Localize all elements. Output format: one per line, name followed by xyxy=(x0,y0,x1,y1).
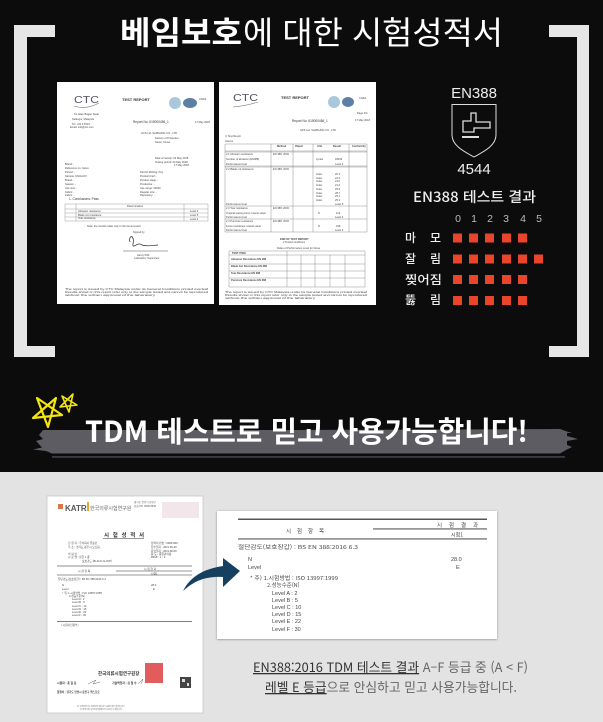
document: KATRI test report: 발행처 : 경기도 안양시 동안구 엑스포로 xyxy=(57,690,100,694)
document: CTC test report page 2: EN 388: 2003 xyxy=(273,219,289,223)
rating chart xyxy=(405,213,543,308)
document: CTC test report page 2: 29.3 xyxy=(335,187,341,191)
document: CTC test report page 2: Level 4 xyxy=(335,228,344,232)
callout panel: magnified test result: 2.성능수준(N) xyxy=(267,581,300,589)
document: KATRI test report: 접수일자 : 2021.05.20 xyxy=(151,545,177,549)
scale numbers xyxy=(455,213,542,225)
document: CTC test report page 1: Fabric: - xyxy=(65,193,75,197)
document: CTC test report page 1: Sample: UNIGLOV xyxy=(65,174,87,178)
document: KATRI test report: Level E : 22 xyxy=(72,610,87,614)
callout panel: magnified test result: N xyxy=(248,557,252,563)
document: CTC test report page 2: II. Test Result xyxy=(225,134,241,138)
callout panel: magnified test result: 28.0 xyxy=(451,557,462,563)
document: KATRI test report: Level F : 30 xyxy=(72,613,87,617)
document: KATRI test report: 보호가드 (BLACK GLOVE) xyxy=(82,559,112,563)
document: KATRI test report: 시험1 xyxy=(151,572,158,576)
document: CTC test report page 2: N xyxy=(318,224,320,228)
document: CTC test report page 2: Number of abrasion (EN388) xyxy=(226,157,259,161)
document: KATRI test report: 의 뢰 인 : xyxy=(68,552,79,556)
document: CTC test report page 2: 158 xyxy=(336,224,341,228)
document: KATRI test report: PAGE : 1 / 2 xyxy=(151,555,166,559)
caption text: EN388:2016 TDM 테스트 결과 A–F 등급 중 (A < F) xyxy=(253,657,528,676)
document: CTC test report page 1: TEST REPORT xyxy=(122,97,151,102)
document: CTC test report page 1: 1. Conclusions: Pass xyxy=(69,197,99,201)
document: CTC test report page 1: Repository: - xyxy=(140,193,155,197)
document: CTC test report page 1: Seoul, Korea xyxy=(155,140,171,144)
document: CTC test report page 1: Email: info@ctc.com xyxy=(70,125,94,129)
callout panel: magnified test result: 시 험 결 과 xyxy=(437,521,478,529)
document: KATRI test report: KATR xyxy=(65,504,87,513)
document: KATRI test report xyxy=(47,496,203,713)
document: CTC test report page 2: Results shown in this report refer only to the sample tested and cannot be reproduced xyxy=(225,293,368,297)
title: 에 대한 시험성적서 xyxy=(243,8,503,54)
document: CTC test report page 1: Selangor, Malaysia xyxy=(72,117,94,121)
document: CTC test report page 1: 17 May 2018 xyxy=(174,163,190,167)
document: CTC test report page 1: Product brief: - xyxy=(140,174,157,178)
document: KATRI test report: * 주) 1.시험방법 : ISO 13997:1999 xyxy=(62,591,102,595)
document: KATRI test report: N xyxy=(62,583,64,587)
callout panel: magnified test result: 절단감도(보호장갑) : BS EN 388:2016 6.3 xyxy=(238,543,358,551)
document: CTC test report page 2: Unit xyxy=(317,144,322,148)
callout panel: magnified test result: 시 험 항 목 xyxy=(286,527,324,535)
rating squares xyxy=(453,234,543,305)
scale numbers: 4 xyxy=(520,213,526,225)
caption text: 레벨 E 등급으로 안심하고 믿고 사용가능합니다. xyxy=(265,677,517,696)
document: CTC test report page 2: Force resistance: lowest value xyxy=(226,224,261,228)
document: KATRI test report: 시 료 명 : 장갑 1 종 xyxy=(68,555,90,559)
document: CTC test report page 1: without the written approval of the laboratory xyxy=(65,293,156,297)
document: CTC test report page 1: Tear resistance xyxy=(78,216,96,220)
document: CTC test report page 1: Abrasion resistance xyxy=(78,209,101,213)
heading: EN388: EN388 xyxy=(451,85,497,102)
document: CTC test report page 1: CNAS xyxy=(199,97,206,101)
row labels xyxy=(405,229,442,308)
row labels: 뚫 xyxy=(405,291,416,308)
light background panel xyxy=(0,472,603,722)
document: CTC test report page 1: The report is issued by CTC Malaysia under its General Conditions printed overleaf xyxy=(65,287,208,291)
caption text xyxy=(253,657,528,696)
document: KATRI test report: 경기도 안양시 동안구 xyxy=(134,500,157,504)
document: CTC test report page 2: Index xyxy=(316,179,323,183)
document: CTC test report page 2: Object xyxy=(295,144,303,148)
document: CTC test report page 1: Results shown in this report refer only to the sample tested and cannot be reproduced xyxy=(65,290,209,294)
document: CTC test report page 1: Brand: - xyxy=(65,162,74,166)
document: KATRI test report: 완료일자 : 2021.06.09 xyxy=(151,549,177,553)
document: CTC test report page 2: TEST REPORT xyxy=(281,95,310,100)
document: CTC test report page 2: Performance level xyxy=(226,215,247,219)
document: CTC test report page 1: Blade cut resistance xyxy=(78,213,102,217)
document: CTC test report page 2: Conformity xyxy=(352,144,366,148)
document: KATRI test report: 한국의류시험연구원 xyxy=(90,505,132,512)
document: CTC test report page 2: Level 5 xyxy=(335,202,344,206)
document: KATRI test report: 용 도 : 품질관리용 xyxy=(151,552,172,556)
document: CTC test report page 2: Performance level xyxy=(226,202,247,206)
document: CTC test report page 2: EN 388: 2003 xyxy=(273,206,289,210)
callout panel: magnified test result: Level C : 10 xyxy=(272,605,301,611)
document: KATRI test report: 절단감도(보호장갑) : BS EN 388:2016 6.3 xyxy=(58,577,106,581)
frame brackets xyxy=(14,25,589,357)
document: CTC test report page 1: CTC xyxy=(74,95,99,106)
document: CTC test report page 2: EN 388: 2003 xyxy=(273,167,289,171)
document: CTC test report page 1: Signed by xyxy=(133,230,145,234)
document: CTC test report page 2: N xyxy=(318,211,320,215)
document: CTC test report page 2: GPS Ltd. SAMSUNG CO., LTD xyxy=(300,128,336,132)
document: CTC test report page 2: 2.2 Blade cut resistance xyxy=(226,167,254,171)
scale numbers: 1 xyxy=(471,213,477,225)
document: CTC test report page 2: 29.1 xyxy=(335,194,341,198)
row labels: 모 xyxy=(430,229,441,246)
document: CTC test report page 1: Brand: - xyxy=(65,178,74,182)
callout panel: magnified test result: E xyxy=(456,565,460,571)
title xyxy=(120,8,503,54)
title: 베임보호 xyxy=(120,8,242,54)
document: KATRI test report: 한국의류시험연구원장 xyxy=(98,670,139,677)
document: CTC test report page 2: Index xyxy=(316,194,323,198)
callout panel: magnified test result: Level xyxy=(248,565,261,571)
document: CTC test report page 2: Blade Cut Resistance EN 388 xyxy=(231,264,267,268)
document: CTC test report page 1 xyxy=(57,82,214,304)
document: CTC test report page 1: Use range: 33020 xyxy=(140,186,161,190)
document: CTC test report page 1: 61 Jalan Bagan Serai xyxy=(74,112,99,116)
document: CTC test report page 1: Level 4 xyxy=(190,217,199,221)
document: KATRI test report: 전화 031 0000 0000 xyxy=(134,504,157,508)
document: CTC test report page 2: Gloves xyxy=(225,139,234,143)
document: CTC test report page 1: Product stage: - xyxy=(140,178,158,182)
document: KATRI test report: 이 시험성적서는 의뢰인이 제시한 시료에 대한 결과입니다 xyxy=(77,704,125,708)
document: KATRI test report: 주 소 : 경기도 광주시 오포읍 xyxy=(68,545,100,549)
document: KATRI test report: 2.성능수준(N) xyxy=(69,594,85,598)
document: KATRI test report: E xyxy=(153,587,155,591)
document: CTC test report page 2: Abrasion Resistance EN 388 xyxy=(231,257,267,261)
document: CTC test report page 2: Method xyxy=(277,144,287,148)
arrow: document to callout xyxy=(183,558,240,591)
document: CTC test report page 2: 2.1 Abrasion resistance xyxy=(226,152,254,156)
document: CTC test report page 2: EN 388: 2003 xyxy=(273,152,289,156)
document: CTC test report page 1: Laboratory Supervisor xyxy=(134,256,160,260)
document: CTC test report page 2: Performance level xyxy=(226,228,247,232)
document: CTC test report page 1: 17 May 2018 xyxy=(195,120,211,124)
document: CTC test report page 2: TEST ITEM xyxy=(232,251,246,255)
document: KATRI test report: 이 성적서의 일부만을 발췌하여 사용할 수 없습니다 xyxy=(80,707,122,711)
document: CTC test report page 2: 2 Tested conditions xyxy=(283,240,306,244)
document: CTC test report page 1: Determination xyxy=(127,204,144,208)
brush stroke banner background xyxy=(33,429,578,458)
document: CTC test report page 1: Tel: +60 3 8723 xyxy=(72,122,90,126)
document: CTC test report page 2: Index xyxy=(316,191,323,195)
document: KATRI test report: 시 험 결 과 xyxy=(144,567,157,571)
row labels: 마 xyxy=(405,229,416,246)
callout panel: magnified test result: 시험1 xyxy=(451,532,463,538)
document: CTC test report page 2: Report No: 619000456_1 xyxy=(292,119,328,123)
callout panel: magnified test result xyxy=(217,511,497,639)
scale numbers: 2 xyxy=(487,213,493,225)
document: CTC test report page 2: 20.3 xyxy=(335,172,341,176)
document: CTC test report page 2: 24.0 xyxy=(335,179,341,183)
document: CTC test report page 2: Index xyxy=(316,172,323,176)
row labels: 찢어짐 xyxy=(405,271,442,288)
document: KATRI test report: 기술책임자 : 김 철 수 xyxy=(112,681,137,685)
banner slogan: TDM 테스트로 믿고 사용가능합니다! xyxy=(85,409,528,451)
document: KATRI test report: Level D : 15 xyxy=(72,607,87,611)
document: CTC test report page 2: without the written approval of the laboratory xyxy=(225,296,316,300)
document: CTC test report page 1: Fabric: - xyxy=(65,190,75,194)
document: CTC test report page 2: Index xyxy=(316,187,323,191)
document: KATRI test report: Level B : 5 xyxy=(72,600,85,604)
document: KATRI test report: [ 시험사진첨부 ] xyxy=(61,623,79,627)
document: CTC test report page 2: Tear Resistance EN 388 xyxy=(231,271,261,275)
document: CTC test report page 2: Result xyxy=(333,144,341,148)
document: KATRI test report: Level xyxy=(62,587,69,591)
document: CTC test report page 1: Reference no: Glove xyxy=(65,166,89,170)
document: CTC test report page 2: Puncture Resistance EN 388 xyxy=(231,278,267,282)
scale numbers: 5 xyxy=(536,213,542,225)
document: CTC test report page 1: Season: - xyxy=(65,182,76,186)
document: CTC test report page 2: Level 4 xyxy=(335,162,344,166)
callout panel: magnified test result: Level D : 15 xyxy=(272,612,301,618)
document: KATRI test report: 시 험 항 목 xyxy=(78,569,91,573)
document: KATRI test report: 시험자 : 홍 길 동 xyxy=(57,681,77,685)
document: CTC test report page 2: 2.3 Tear resistance xyxy=(226,206,248,210)
document: KATRI test report: 성적서 번호 : 0000 000 xyxy=(151,541,178,545)
document: CTC test report page 1: Productive: - xyxy=(140,182,155,186)
document: CTC test report page 2: Level 4 xyxy=(335,215,344,219)
document: CTC test report page 2: 113 xyxy=(336,211,341,215)
document: CTC test report page 2: Index xyxy=(316,176,323,180)
document: CTC test report page 2: 21.6 xyxy=(335,183,341,187)
document: CTC test report page 1: Testing period: 03 May 2018 xyxy=(155,160,188,164)
document: CTC test report page 1: Use size: - xyxy=(65,186,77,190)
scale numbers: 3 xyxy=(503,213,509,225)
document: KATRI test report: Level A : 2 xyxy=(72,597,85,601)
document: CTC test report page 1: GCS Ltd. SAMSUNG CO., LTD xyxy=(141,131,177,135)
document: CTC test report page 1: Period: - xyxy=(65,170,75,174)
row labels: 잘 xyxy=(405,250,416,267)
row labels: 림 xyxy=(430,291,441,308)
document: CTC test report page 1: Level 4 xyxy=(190,209,199,213)
document: CTC test report page 1: Level 5 xyxy=(190,213,199,217)
document: CTC test report page 1: Factory of Protective xyxy=(155,136,179,140)
document: CTC test report page 1: Date of receipt: 03 May 2018 xyxy=(155,156,189,160)
document: CTC test report page 2: Index xyxy=(316,198,323,202)
document: KATRI test report: 신 청 자 : 주식회사 유홀런 xyxy=(68,541,98,545)
document: CTC test report page 1: Henry KIM xyxy=(137,253,149,257)
document: CTC test report page 2: CTC xyxy=(233,93,258,104)
document: CTC test report page 2: Rules of Performance Level for Glove xyxy=(277,246,321,250)
document: CTC test report page 2 xyxy=(219,82,376,305)
document: CTC test report page 2: Index xyxy=(316,183,323,187)
icon: yellow stars xyxy=(33,394,77,427)
scale numbers: 0 xyxy=(455,213,461,225)
document: KATRI test report: Level C : 10 xyxy=(72,604,87,608)
document: CTC test report page 1: Note: the results relate only to the items tested xyxy=(87,224,141,228)
document: CTC test report page 1: Part ID Melting: Key xyxy=(140,170,164,174)
document: CTC test report page 2: 2.4 Puncture resistance xyxy=(226,219,254,223)
document: CTC test report page 2: The report is issued by CTC Malaysia under its General Conditions printed overleaf xyxy=(225,290,367,294)
callout panel: magnified test result: Level F : 30 xyxy=(272,627,301,633)
document: CTC test report page 2: 28.7 xyxy=(335,191,341,195)
document: CTC test report page 2: 18469 xyxy=(335,157,343,161)
document: CTC test report page 1: Report No: 619000456_1 xyxy=(133,120,169,124)
document: CTC test report page 2: 17 May 2018 xyxy=(355,118,371,122)
document: CTC test report page 2: 22.3 xyxy=(335,176,341,180)
document: CTC test report page 2: CNAS xyxy=(359,96,366,100)
document: CTC test report page 2: Page 2/4 xyxy=(357,111,368,115)
document: CTC test report page 2: Performance level xyxy=(226,162,247,166)
rating number: 4544: 4544 xyxy=(457,161,491,178)
callout panel: magnified test result: Level E : 22 xyxy=(272,619,301,625)
document: CTC test report page 1: Regular size: - xyxy=(140,190,157,194)
dark background panel xyxy=(0,0,603,472)
callout panel: magnified test result: Level A : 2 xyxy=(272,591,297,597)
document: CTC test report page 2: Original tearing force: lowest value xyxy=(226,211,266,215)
row labels: 림 xyxy=(430,250,441,267)
document: CTC test report page 2: cycles xyxy=(316,157,324,161)
callout panel: magnified test result: Level B : 5 xyxy=(272,598,298,604)
document: KATRI test report: 28.0 xyxy=(151,583,157,587)
callout panel: magnified test result: * 주) 1.시험방법 : ISO 13997:1999 xyxy=(250,574,338,582)
icon: EN388 glove shield xyxy=(452,104,496,157)
document: CTC test report page 2: END OF TEST REPORT xyxy=(280,237,309,241)
document: KATRI test report: 시 험 성 적 서 xyxy=(104,531,144,539)
document: CTC test report page 2: 25.3 xyxy=(335,198,341,202)
heading: EN388 test result: EN388 테스트 결과 xyxy=(413,187,536,207)
